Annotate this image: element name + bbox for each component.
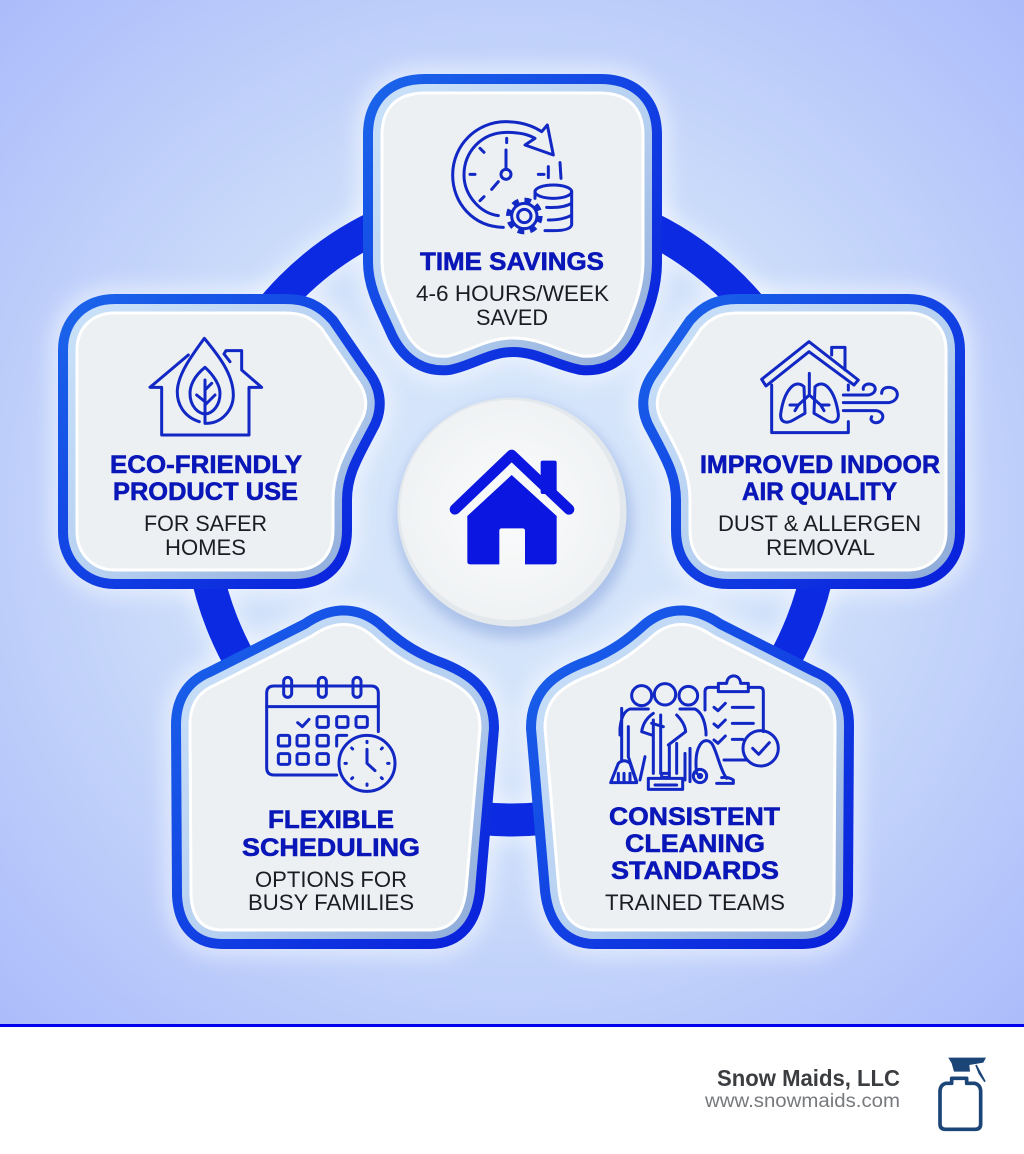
icon: spray bottle logo <box>940 1058 986 1129</box>
heading: eco-friendly: ECO-FRIENDLY <box>110 451 302 479</box>
panel: flexible scheduling <box>190 624 480 930</box>
footer website: www.snowmaids.com <box>704 1091 900 1112</box>
centre disc with house icon <box>396 398 632 638</box>
text: homes: HOMES <box>165 535 246 560</box>
heading: cleaning: CLEANING <box>625 830 765 858</box>
card glow halos <box>77 93 946 930</box>
panel: time savings <box>382 93 643 356</box>
heading: air quality: AIR QUALITY <box>742 478 897 506</box>
heading: time savings: TIME SAVINGS <box>420 248 604 276</box>
panel: improved indoor air quality <box>657 313 946 570</box>
icon: cleaning team with checklist <box>611 676 778 789</box>
panel: consistent cleaning standards <box>545 624 835 930</box>
text: removal: REMOVAL <box>766 535 875 560</box>
icon: eco house <box>150 338 262 435</box>
text: dust and allergen: DUST & ALLERGEN <box>718 511 921 536</box>
icon: house with lungs and air <box>762 342 897 433</box>
heading: consistent: CONSISTENT <box>609 803 780 831</box>
connecting ring <box>200 196 824 820</box>
text: saved: SAVED <box>476 305 548 330</box>
text: options for: OPTIONS FOR <box>255 867 407 892</box>
icon: clock with gear and database <box>453 122 572 232</box>
icon: house <box>455 455 569 564</box>
heading: flexible: FLEXIBLE <box>268 806 394 834</box>
heading: standards: STANDARDS <box>611 857 779 885</box>
heading: product use: PRODUCT USE <box>113 478 298 506</box>
icon: calendar and clock <box>267 677 395 791</box>
text: trained teams: TRAINED TEAMS <box>605 890 785 915</box>
footer company name: Snow Maids, LLC <box>717 1065 900 1091</box>
heading: improved indoor: IMPROVED INDOOR <box>700 451 940 479</box>
footer panel <box>0 1027 1024 1154</box>
text: hours per week: 4-6 HOURS/WEEK <box>416 281 609 306</box>
heading: scheduling: SCHEDULING <box>242 834 420 862</box>
text: busy families: BUSY FAMILIES <box>248 890 414 915</box>
panel: eco-friendly product use <box>77 313 366 570</box>
text: for safer: FOR SAFER <box>144 511 267 536</box>
